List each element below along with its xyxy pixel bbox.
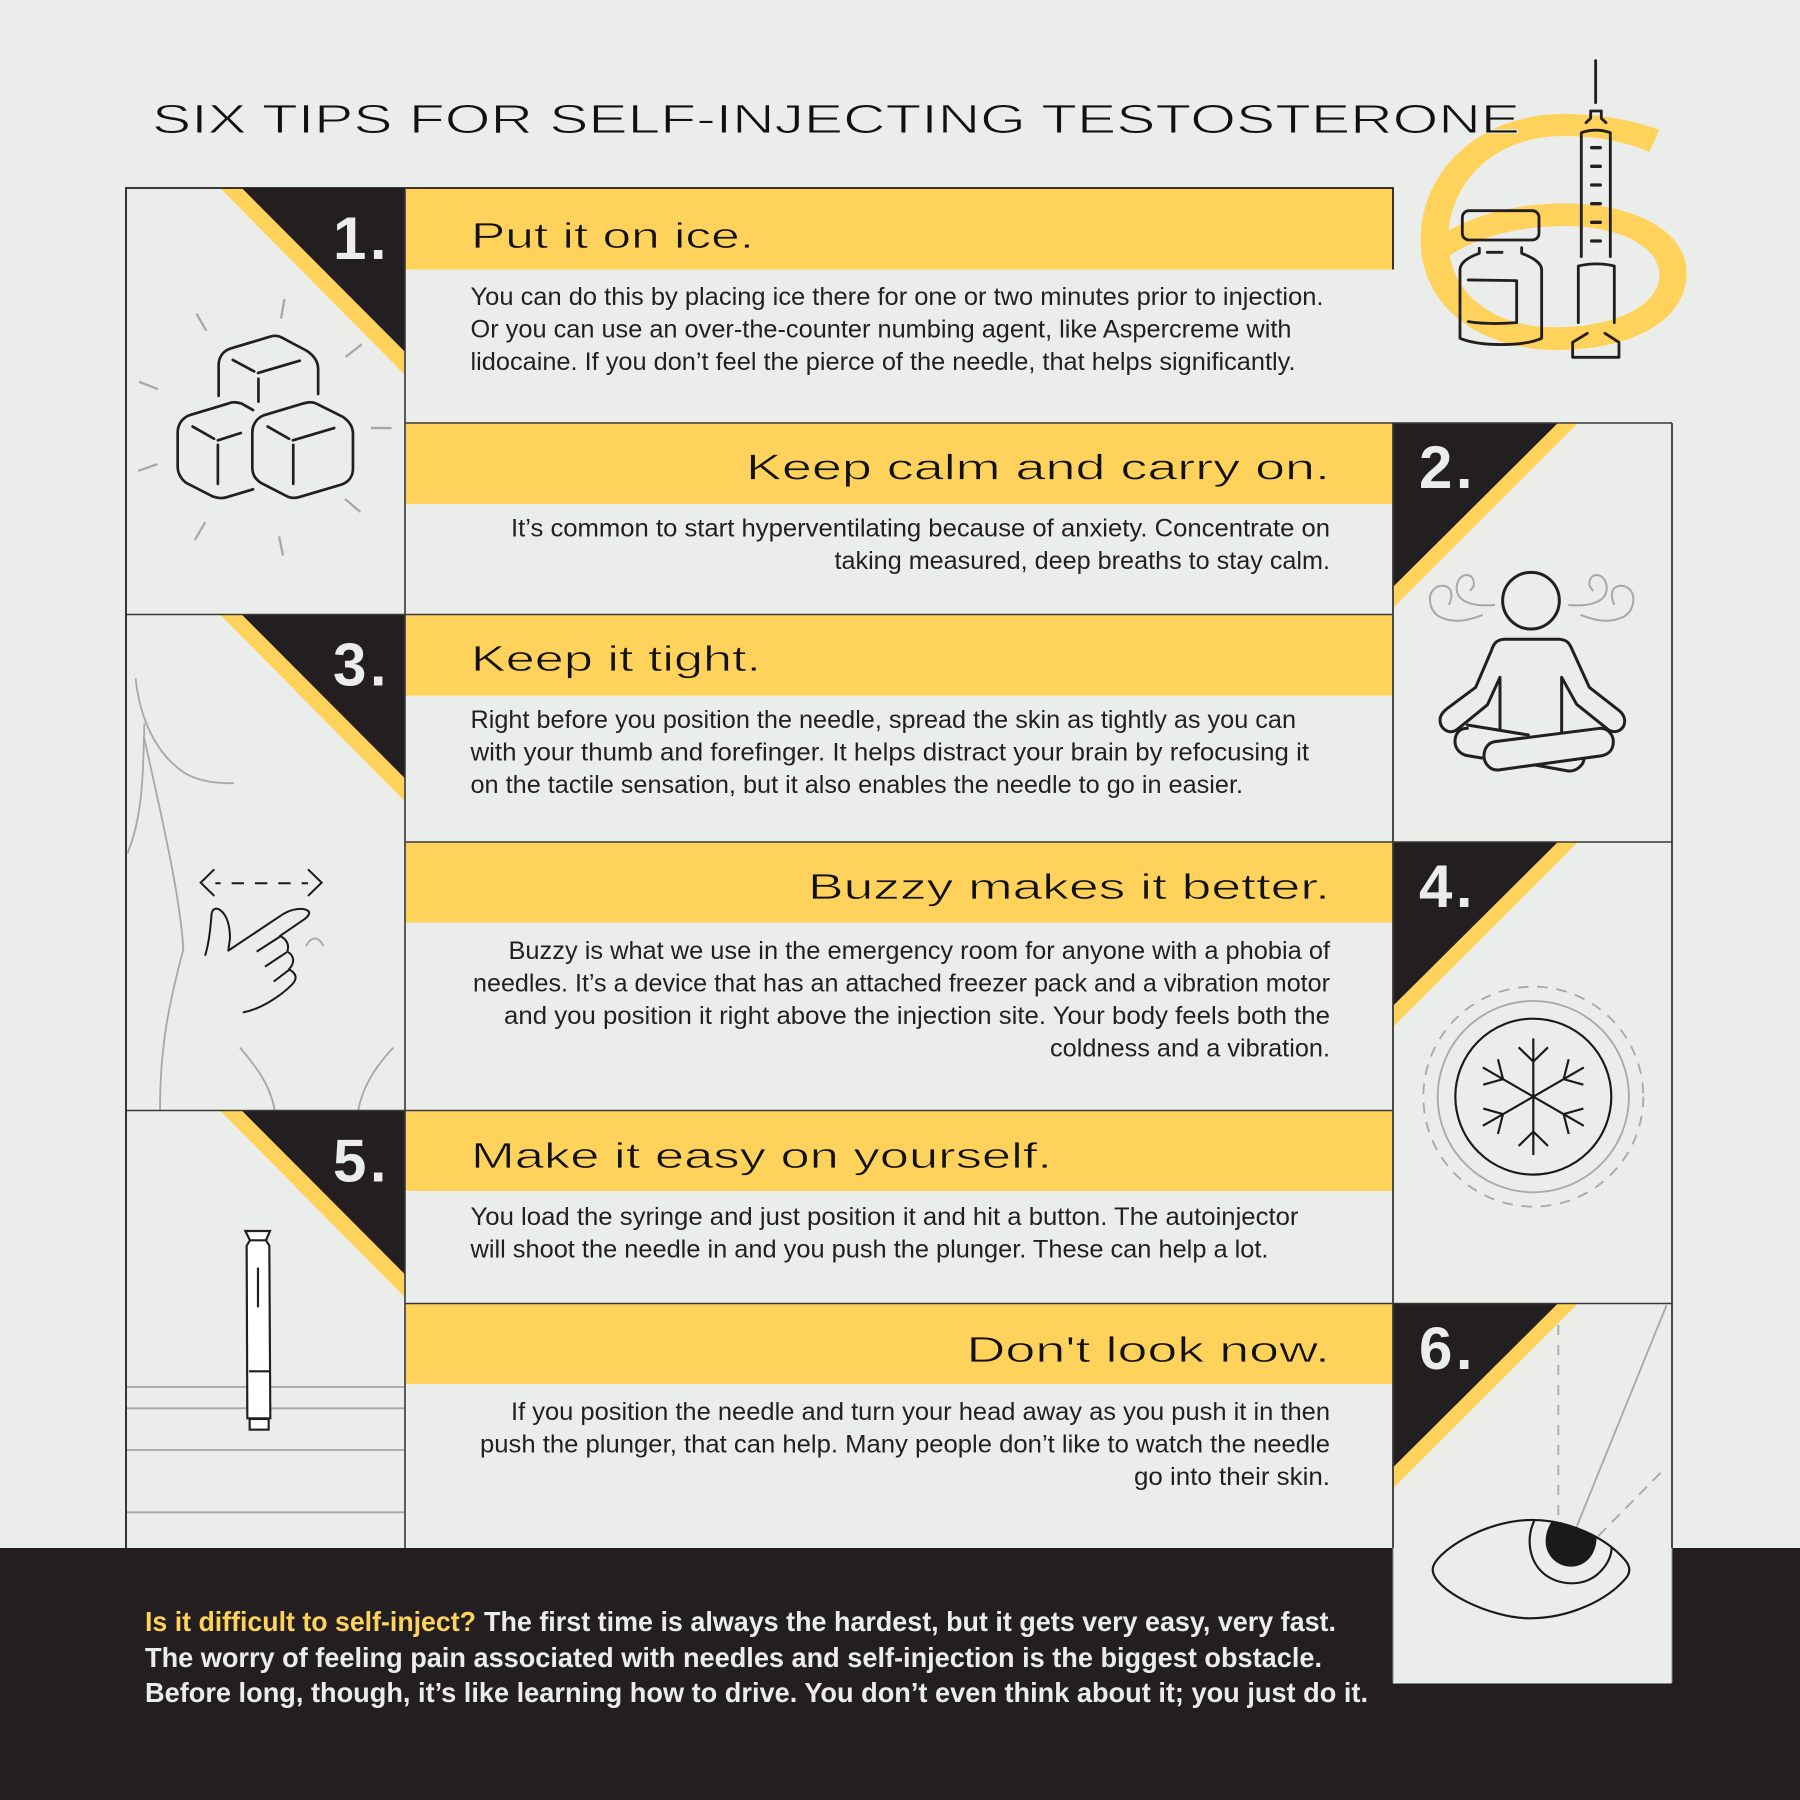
footer text: Before long, though, it’s like learning how to drive. You don’t even think about it; you just do it.	[145, 1677, 1368, 1708]
icon: torso and hand stretching skin	[127, 678, 393, 1110]
body text 1: Or you can use an over-the-counter numbing agent, like Aspercreme with	[470, 316, 1292, 344]
panel: tip 6	[405, 1304, 1672, 1684]
big yellow numeral 6	[1421, 114, 1687, 350]
body text 2	[511, 514, 1330, 575]
heading bar 5	[405, 1111, 1393, 1191]
number corner 4	[1393, 842, 1578, 1027]
panel: tip 4	[405, 842, 1643, 1207]
number corner 1	[220, 188, 405, 375]
number corner 5	[220, 1110, 405, 1298]
heading bar 4	[405, 842, 1393, 922]
icon: meditating person	[1430, 572, 1633, 771]
heading bar 3	[405, 615, 1393, 696]
heading bar 6: Don't look now.	[966, 1329, 1330, 1370]
body text 1: You can do this by placing ice there for one or two minutes prior to injection.	[470, 283, 1324, 311]
number corner 6	[1393, 1304, 1578, 1488]
heading bar 4: Buzzy makes it better.	[808, 866, 1330, 907]
heading bar 3: Keep it tight.	[471, 638, 761, 679]
heading bar 2	[405, 423, 1393, 504]
number corner 2	[1393, 423, 1578, 608]
body text 3: with your thumb and forefinger. It helps distract your brain by refocusing it	[469, 738, 1309, 766]
number corner 4: 4.	[1419, 853, 1476, 920]
body text 4: Buzzy is what we use in the emergency room for anyone with a phobia of	[508, 937, 1330, 965]
body text 3: Right before you position the needle, spread the skin as tightly as you can	[470, 706, 1296, 734]
icon: eye looking away	[1433, 1305, 1667, 1618]
heading bar 6	[405, 1304, 1393, 1384]
number corner 6: 6.	[1419, 1315, 1476, 1382]
title: SIX TIPS FOR SELF-INJECTING TESTOSTERONE	[152, 96, 1520, 142]
body text 5: will shoot the needle in and you push the plunger. These can help a lot.	[469, 1236, 1269, 1264]
body text 1	[470, 283, 1324, 376]
body text 4	[473, 937, 1330, 1062]
number corner 5: 5.	[333, 1128, 390, 1194]
heading bar 5: Make it easy on yourself.	[471, 1135, 1052, 1176]
icon: ice cubes	[138, 299, 392, 555]
body text 6	[480, 1398, 1330, 1491]
body text 5	[469, 1203, 1299, 1264]
panel: tip 2	[405, 423, 1633, 771]
body text 6: go into their skin.	[1134, 1463, 1330, 1491]
panel: tip 1	[138, 188, 1393, 555]
body text 1: lidocaine. If you don’t feel the pierce of the needle, that helps significantly.	[470, 348, 1296, 376]
number corner 3: 3.	[333, 632, 390, 698]
heading bar 2: Keep calm and carry on.	[746, 446, 1330, 488]
heading bar 1	[405, 188, 1393, 270]
icon: snowflake in circles	[1423, 987, 1643, 1207]
footer text	[145, 1606, 1368, 1708]
number corner 2: 2.	[1419, 434, 1476, 501]
illustration panel background 6	[1393, 1304, 1672, 1684]
body text 6: If you position the needle and turn your head away as you push it in then	[511, 1398, 1330, 1426]
icon: vial and syringe	[1460, 61, 1619, 357]
body text 3	[469, 706, 1309, 799]
body text 2: It’s common to start hyperventilating because of anxiety. Concentrate on	[511, 514, 1330, 542]
body text 2: taking measured, deep breaths to stay calm.	[834, 547, 1330, 575]
number corner 1: 1.	[333, 205, 390, 272]
body text 5: You load the syringe and just position it and hit a button. The autoinjector	[470, 1203, 1298, 1231]
icon: autoinjector over skin layers	[126, 1231, 405, 1512]
footer text: The first time is always the hardest, but it gets very easy, very fast.	[484, 1606, 1336, 1637]
footer band	[0, 1548, 1800, 1800]
body text 4: needles. It’s a device that has an attached freezer pack and a vibration motor	[473, 970, 1330, 998]
panel: tip 3	[127, 614, 1393, 1110]
panel: tip 5	[126, 1110, 1393, 1512]
heading bar 1: Put it on ice.	[471, 215, 754, 256]
body text 3: on the tactile sensation, but it also enables the needle to go in easier.	[470, 771, 1243, 799]
body text 4: coldness and a vibration.	[1050, 1034, 1330, 1062]
footer text: Is it difficult to self-inject?	[145, 1606, 476, 1637]
body text 6: push the plunger, that can help. Many people don’t like to watch the needle	[480, 1430, 1330, 1458]
number corner 3	[220, 614, 405, 802]
body text 4: and you position it right above the injection site. Your body feels both the	[504, 1002, 1330, 1030]
footer text: The worry of feeling pain associated with needles and self-injection is the biggest obstacle.	[145, 1642, 1322, 1673]
